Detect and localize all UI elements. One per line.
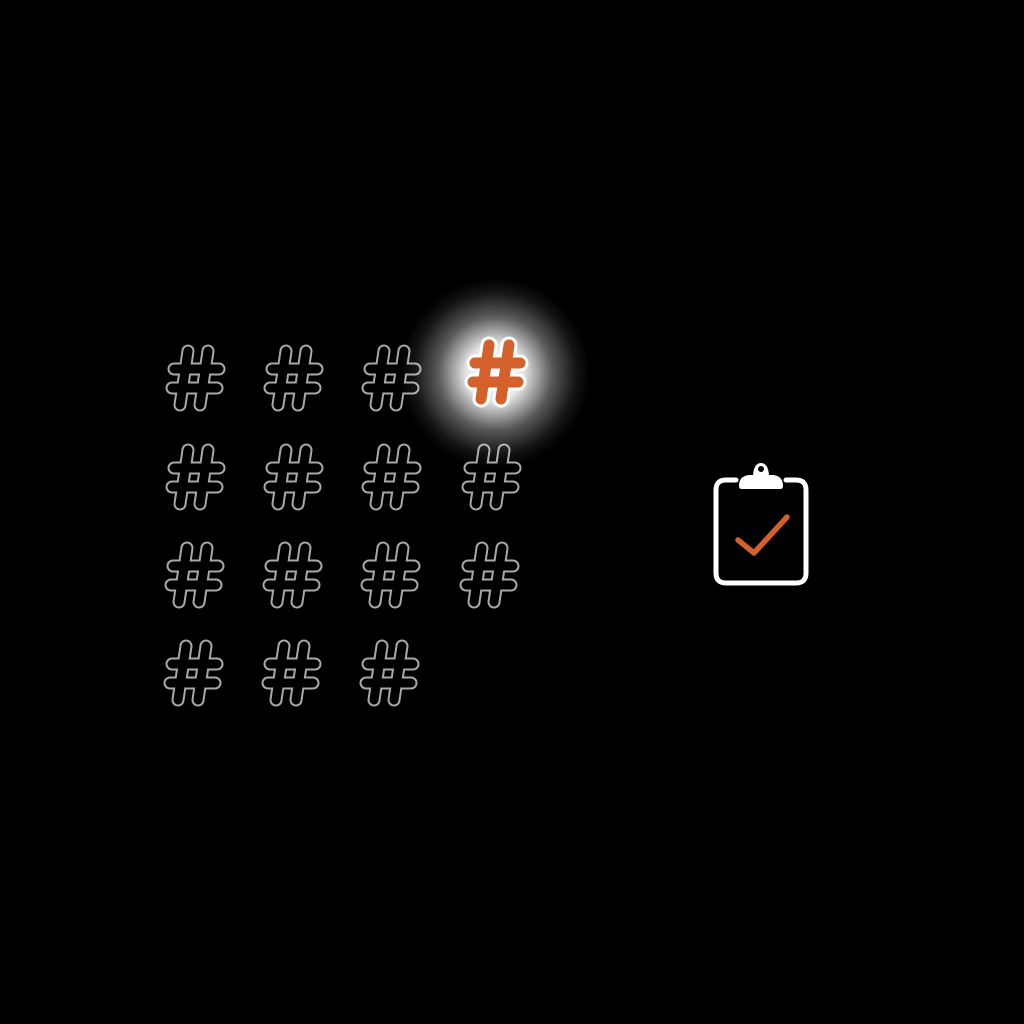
hashtag grid <box>170 351 515 700</box>
icon: clipboard with check <box>716 463 806 583</box>
highlighted hashtag with glow <box>400 278 590 468</box>
